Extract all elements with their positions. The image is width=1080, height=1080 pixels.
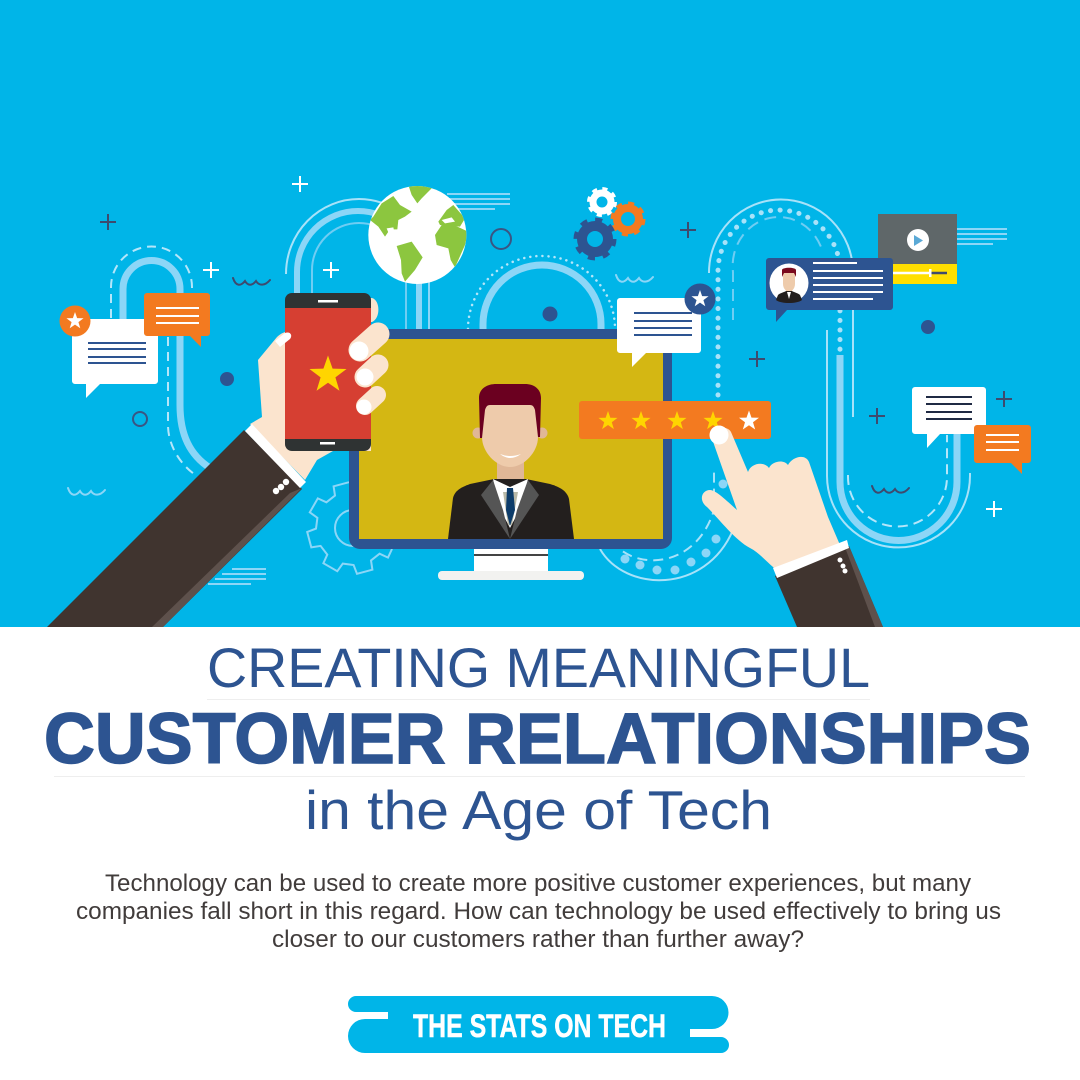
left cuff (245, 424, 306, 488)
lower arc under monitor (600, 470, 733, 580)
fingertip (710, 426, 728, 444)
intro paragraph: closer to our customers rather than further away? (272, 926, 804, 953)
background loop paths (111, 199, 970, 580)
intro paragraph: Technology can be used to create more positive customer experiences, but many (105, 870, 971, 897)
title (44, 636, 1031, 841)
middle white speech bubble (617, 284, 716, 367)
right pointing hand (702, 426, 883, 627)
monitor frame (349, 329, 672, 549)
globe arch (286, 199, 432, 329)
title line 3: in the Age of Tech (305, 779, 772, 841)
monitor stand (474, 549, 548, 572)
banner label: THE STATS ON TECH (413, 1008, 666, 1044)
intro paragraph: companies fall short in this regard. How can technology be used effectively to bring us (76, 898, 1001, 925)
navy star badge (684, 284, 716, 314)
intro paragraph (76, 870, 1001, 953)
phone (285, 293, 371, 451)
orange star badge (60, 306, 90, 336)
right S loop (709, 199, 970, 547)
cuff buttons (273, 479, 289, 494)
thumb nail (275, 332, 291, 347)
palm (250, 331, 371, 480)
video player (878, 214, 957, 284)
title line 2: CUSTOMER RELATIONSHIPS (44, 700, 1031, 779)
left hand holding phone (47, 293, 378, 627)
left orange speech bubble (144, 293, 210, 347)
streak lines by arm (208, 569, 266, 584)
squiggles (68, 275, 909, 495)
finger behind phone (365, 298, 378, 322)
outline gear behind monitor (307, 482, 392, 574)
white gear (589, 189, 615, 215)
star rating bar (579, 401, 771, 439)
title line 1: CREATING MEANINGFUL (207, 636, 870, 699)
fingers (360, 334, 378, 406)
right orange speech bubble (974, 425, 1031, 474)
avatar (770, 264, 808, 303)
dots and rings (133, 229, 935, 426)
monitor screen (359, 339, 663, 539)
navy gear (576, 220, 614, 258)
streak lines by video (957, 229, 1007, 244)
section banner (348, 996, 729, 1053)
hero background (0, 0, 1080, 627)
plus marks (100, 176, 1012, 517)
left white speech bubble (60, 306, 158, 398)
fingernails (350, 342, 374, 414)
streak lines by globe (447, 194, 510, 209)
icon: gears (576, 189, 644, 258)
person on screen (448, 384, 574, 539)
hand (702, 428, 840, 572)
icon: globe (368, 185, 468, 284)
monitor (349, 329, 672, 580)
right white speech bubble (912, 387, 986, 448)
right sleeve (775, 546, 883, 627)
sleeve buttons (838, 558, 848, 574)
left sleeve (47, 430, 302, 627)
navy profile speech bubble (766, 258, 893, 322)
right cuff (773, 540, 849, 578)
left loop (111, 246, 210, 476)
orange gear (612, 204, 644, 234)
center arch (468, 256, 615, 329)
